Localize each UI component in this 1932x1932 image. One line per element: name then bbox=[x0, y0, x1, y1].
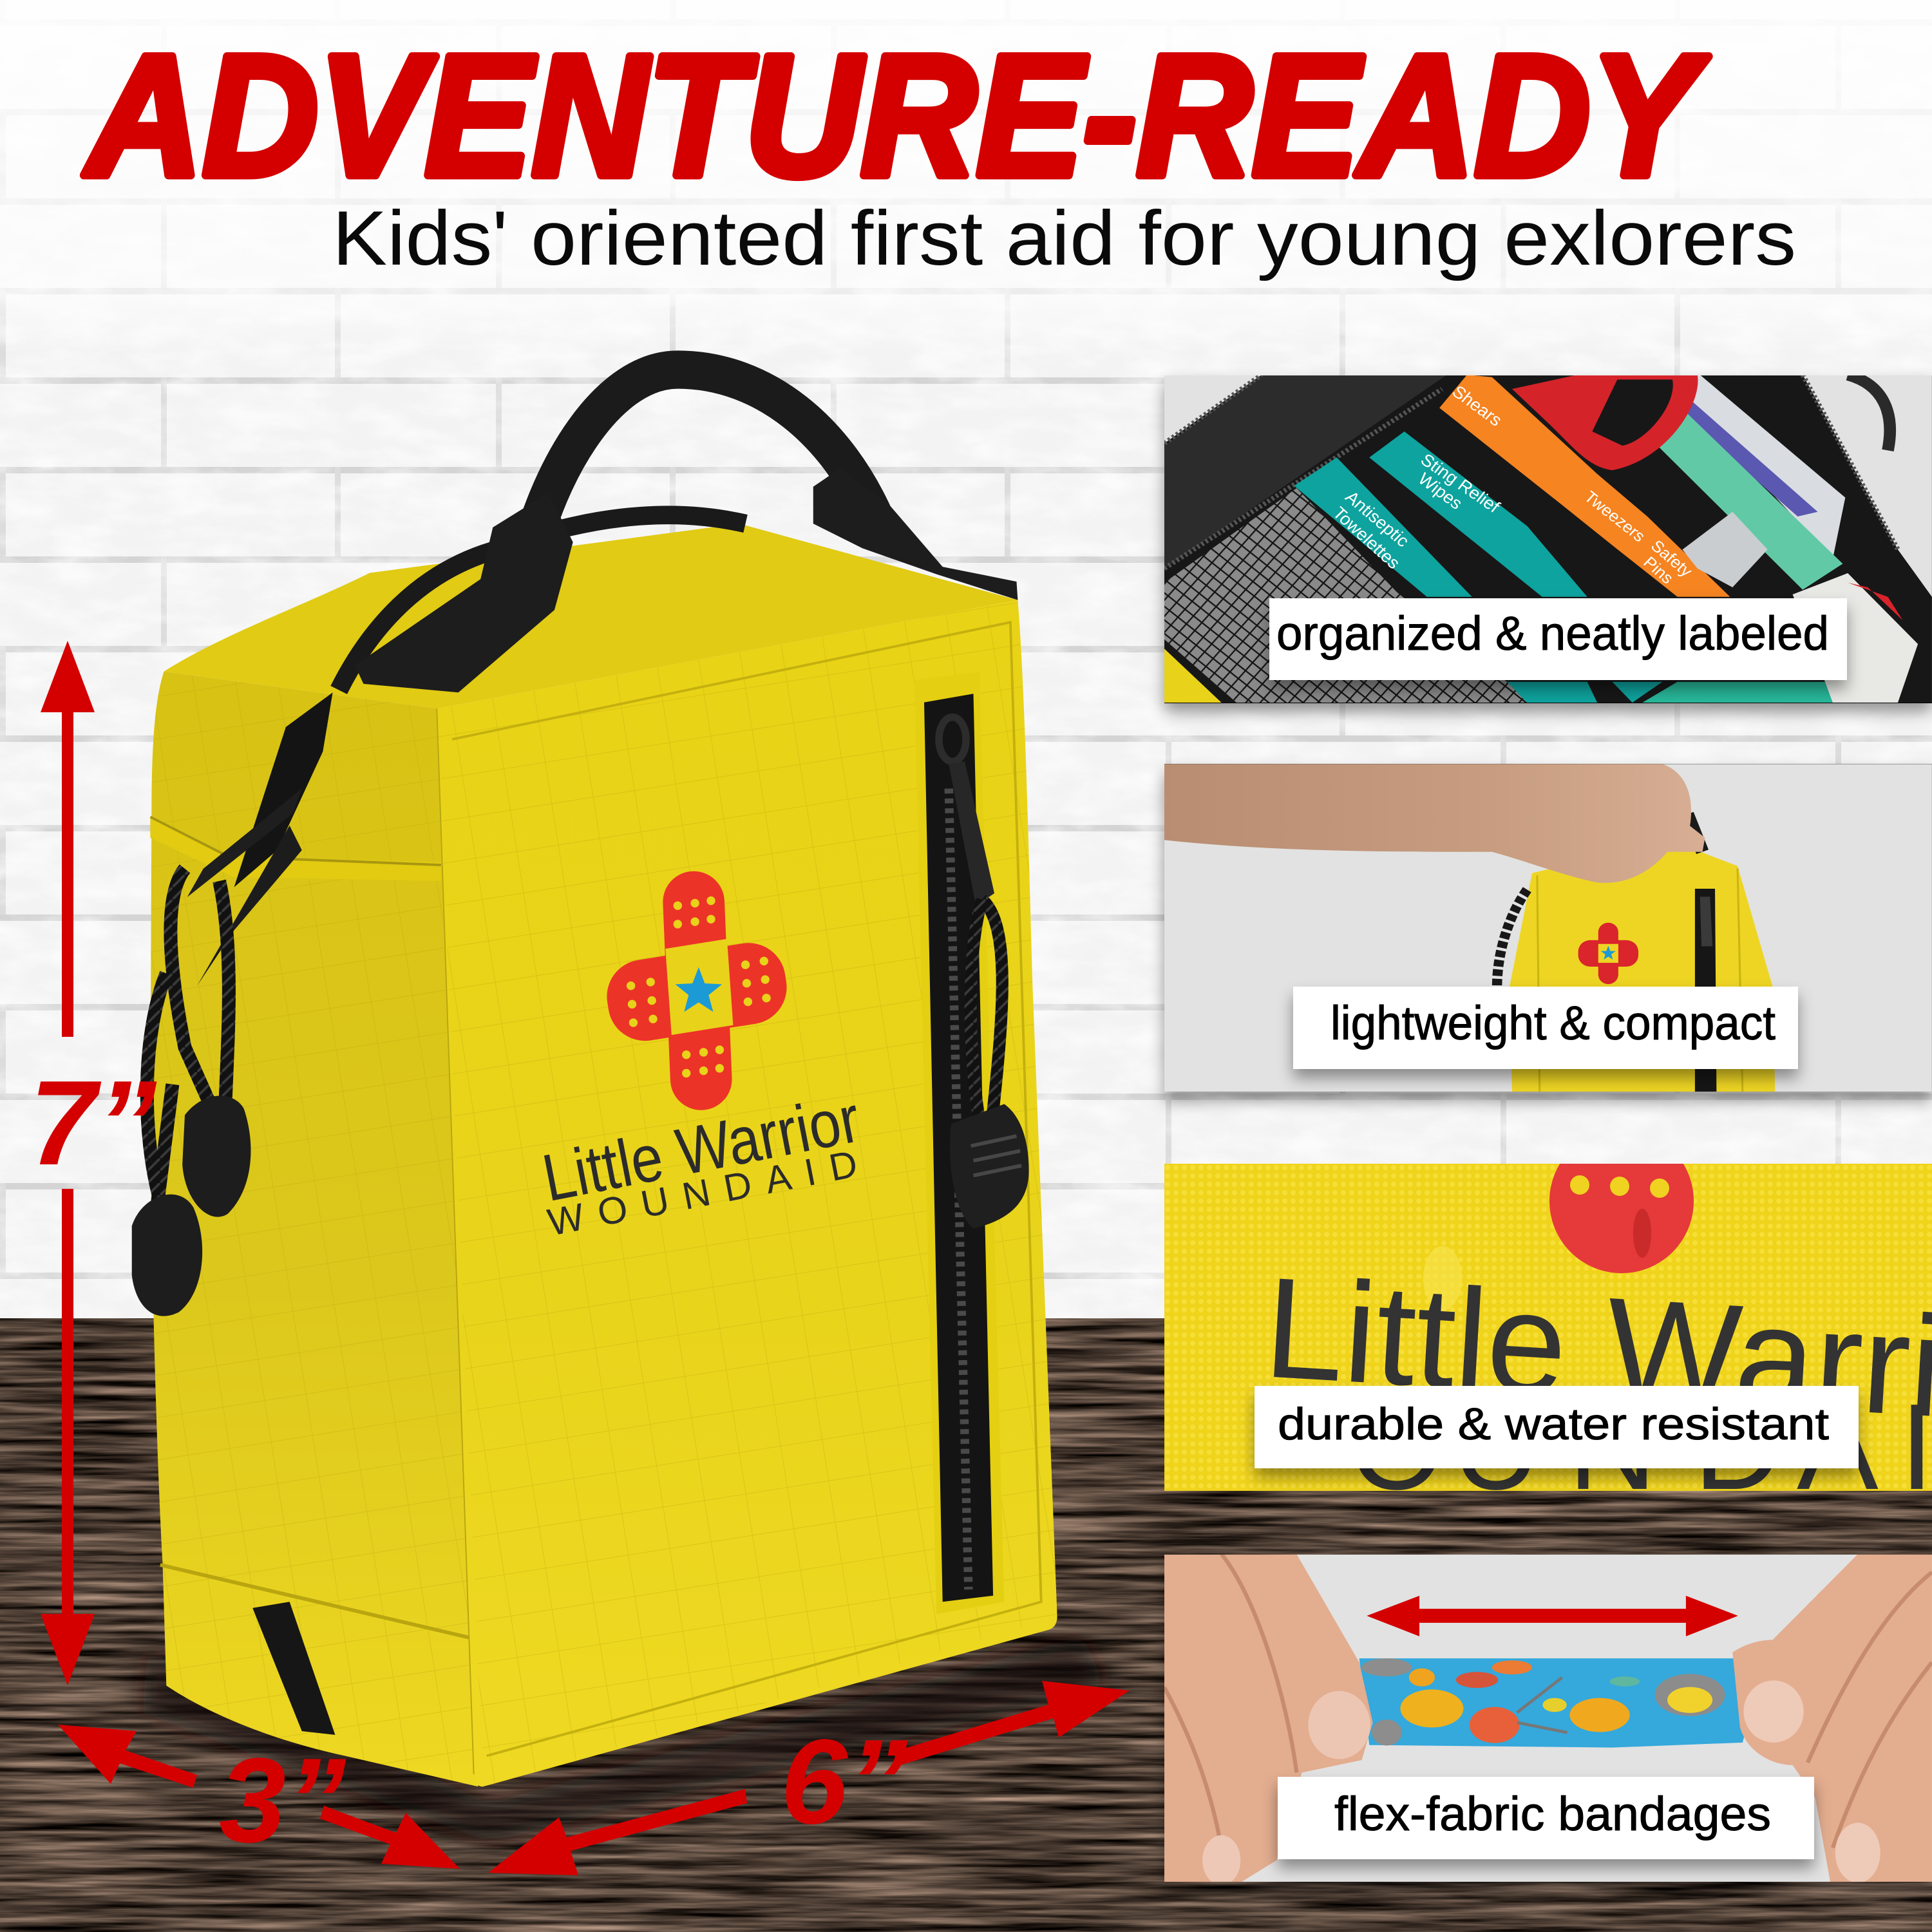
panel: durable and water resistant: OUNDAI bbox=[1349, 1379, 1932, 1515]
logo text: WOUNDAID: WOUNDAID bbox=[544, 1142, 861, 1244]
bag shadow on table bbox=[142, 1636, 1108, 1842]
scissors bbox=[1512, 375, 1698, 470]
cord stopper two bbox=[132, 1195, 202, 1316]
dimension: 6 inch width: 6” bbox=[781, 1714, 908, 1849]
side texture and seams bbox=[150, 672, 478, 1786]
logo text: Little Warrior: Little Warrior bbox=[536, 1081, 866, 1215]
background: white brick wall bbox=[0, 0, 1932, 1320]
front zipper bbox=[924, 694, 994, 1602]
subtitle: Kids' oriented first aid for young exlorers bbox=[332, 195, 1796, 281]
arm and hand bbox=[1164, 764, 1705, 883]
handle right tab bbox=[813, 468, 1018, 600]
panel: lightweight and compact bbox=[1164, 764, 1932, 1092]
label: durable and water resistant bbox=[1255, 1386, 1859, 1468]
bag front panel bbox=[437, 600, 1057, 1786]
panel: flex-fabric bandages bbox=[1164, 1554, 1932, 1886]
left hand bbox=[1164, 1554, 1373, 1886]
small bag bbox=[1510, 840, 1775, 1092]
title: ADVENTURE-READY bbox=[82, 19, 1710, 212]
dimension: 3 inch depth: 3” bbox=[219, 1733, 346, 1868]
label: flex-fabric bandages bbox=[1278, 1777, 1814, 1859]
background: dark wood table bbox=[0, 1318, 1932, 1932]
mint loop bbox=[1659, 413, 1843, 590]
small logo bbox=[1578, 923, 1638, 984]
panel: organized and neatly labeled: Antiseptic bbox=[1341, 487, 1414, 551]
front zipper cord and stopper bbox=[950, 900, 1029, 1229]
plastic pack bbox=[1693, 375, 1846, 555]
label: organized and neatly labeled bbox=[1269, 598, 1847, 680]
panel: organized and neatly labeled: Tweezers bbox=[1580, 488, 1649, 545]
front texture and seams bbox=[437, 600, 1057, 1786]
red bandage fragment with water drops bbox=[1549, 1129, 1694, 1273]
dimension: 7 inch height bbox=[30, 641, 157, 1685]
handle left tab bbox=[355, 493, 573, 692]
label: durable and water resistant: durable & water resistant bbox=[1278, 1399, 1829, 1449]
panel: organized and neatly labeled: Pins bbox=[1640, 554, 1677, 587]
orange loop bbox=[1439, 375, 1730, 597]
white roll bbox=[1793, 573, 1918, 703]
panel: organized and neatly labeled: Shears bbox=[1448, 381, 1506, 430]
cord stopper one bbox=[182, 1096, 251, 1217]
panel: durable and water resistant bbox=[1164, 1129, 1932, 1515]
printed stretch bandage bbox=[1359, 1658, 1765, 1748]
label: organized and neatly labeled: organized & neatly labeled bbox=[1276, 607, 1829, 660]
top zipper bbox=[339, 515, 746, 690]
panel: organized and neatly labeled: Wipes bbox=[1414, 469, 1466, 513]
product: yellow first aid bag bbox=[132, 370, 1057, 1786]
label: flex-fabric bandages: flex-fabric bandages bbox=[1334, 1787, 1771, 1841]
panel: organized and neatly labeled: Sting Relief bbox=[1417, 450, 1504, 516]
stretch double arrow bbox=[1367, 1596, 1738, 1636]
right hand bbox=[1732, 1554, 1932, 1883]
bag top panel bbox=[164, 524, 1018, 708]
dimension: 7 inch height: 7” bbox=[30, 1056, 157, 1190]
label: lightweight and compact: lightweight & compact bbox=[1331, 996, 1776, 1050]
label: lightweight and compact bbox=[1293, 987, 1798, 1069]
mesh pocket bbox=[1164, 488, 1532, 703]
bag handle bbox=[524, 370, 877, 579]
panel: organized and neatly labeled bbox=[1164, 375, 1932, 703]
panel: organized and neatly labeled: Safety bbox=[1647, 537, 1696, 580]
bag side panel bbox=[150, 672, 478, 1786]
teal loops bbox=[1294, 431, 1662, 703]
logo: bandage cross with star bbox=[601, 870, 792, 1112]
dimension: 6 inch width bbox=[488, 1681, 1130, 1875]
dimension: 3 inch depth bbox=[58, 1725, 460, 1869]
panel: organized and neatly labeled: Towelettes bbox=[1329, 503, 1405, 573]
side zippers and cords bbox=[147, 692, 333, 1201]
